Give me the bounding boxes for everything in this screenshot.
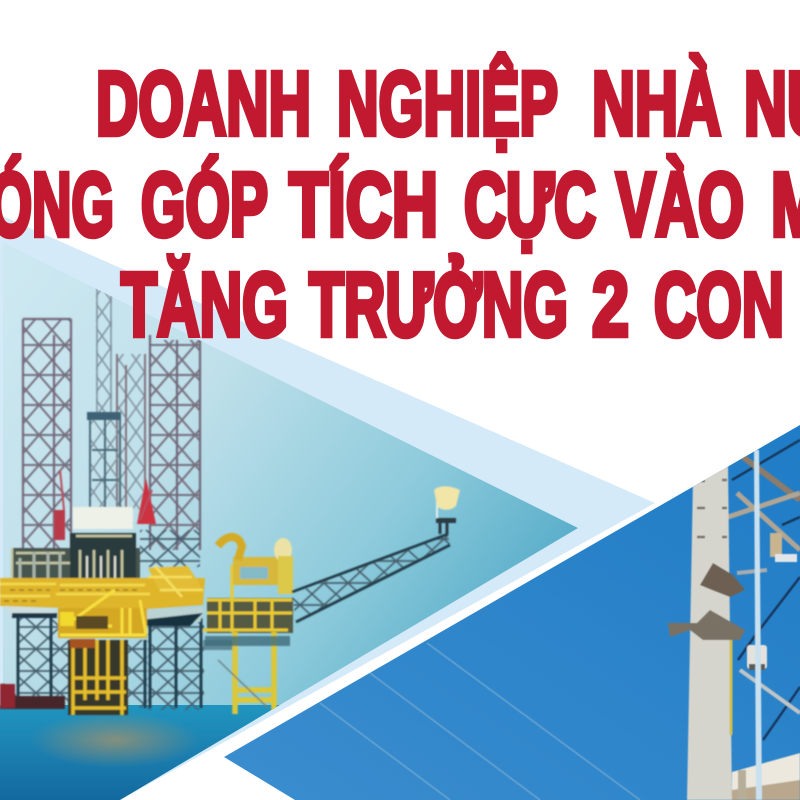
steel cross arms bbox=[728, 457, 800, 713]
title line 1 bbox=[96, 52, 800, 154]
accommodation block bbox=[12, 507, 200, 580]
blue triangle panel bbox=[224, 425, 800, 800]
pale blue triangle frame bbox=[0, 215, 655, 800]
pole brackets bbox=[668, 563, 767, 735]
title line 3: TRƯỞNG bbox=[309, 254, 568, 356]
flare flame bbox=[434, 486, 460, 510]
power lines bbox=[320, 643, 640, 800]
middle lattice tower bbox=[117, 354, 145, 524]
photo: offshore oil rig bbox=[0, 230, 603, 800]
title line 1: DOANH bbox=[96, 54, 311, 154]
insulators bbox=[747, 533, 797, 670]
title line 2 bbox=[0, 154, 800, 256]
left lattice tower bbox=[23, 319, 71, 551]
title line 1: NHÀ bbox=[592, 54, 721, 154]
vertical white rod bbox=[754, 450, 762, 800]
rig structure bbox=[0, 280, 460, 715]
yellow central module bbox=[58, 590, 147, 715]
title line 2: GÓP bbox=[141, 154, 268, 256]
derrick bbox=[87, 280, 121, 510]
title line 2: TÍCH bbox=[289, 154, 438, 256]
flare boom bbox=[292, 497, 456, 622]
black cables bbox=[732, 440, 800, 740]
sky background bbox=[3, 230, 603, 710]
white pipe bbox=[732, 753, 800, 800]
title line 1: NGHIỆP bbox=[337, 52, 558, 154]
title bbox=[0, 52, 800, 356]
concrete pole bbox=[687, 465, 732, 800]
photo: power pole bbox=[320, 440, 800, 800]
title line 3 bbox=[121, 254, 800, 356]
red cranes bbox=[54, 470, 156, 540]
right lattice tower bbox=[150, 335, 200, 550]
title line 2: CỰC bbox=[464, 156, 596, 256]
right yellow platform bbox=[203, 537, 293, 714]
main yellow deck bbox=[0, 566, 205, 626]
title line 3: TĂNG bbox=[121, 254, 288, 356]
supply vessel bbox=[0, 684, 65, 709]
title line 3: 2 bbox=[592, 256, 629, 356]
lower legs bbox=[17, 617, 233, 710]
sea bbox=[0, 705, 280, 800]
